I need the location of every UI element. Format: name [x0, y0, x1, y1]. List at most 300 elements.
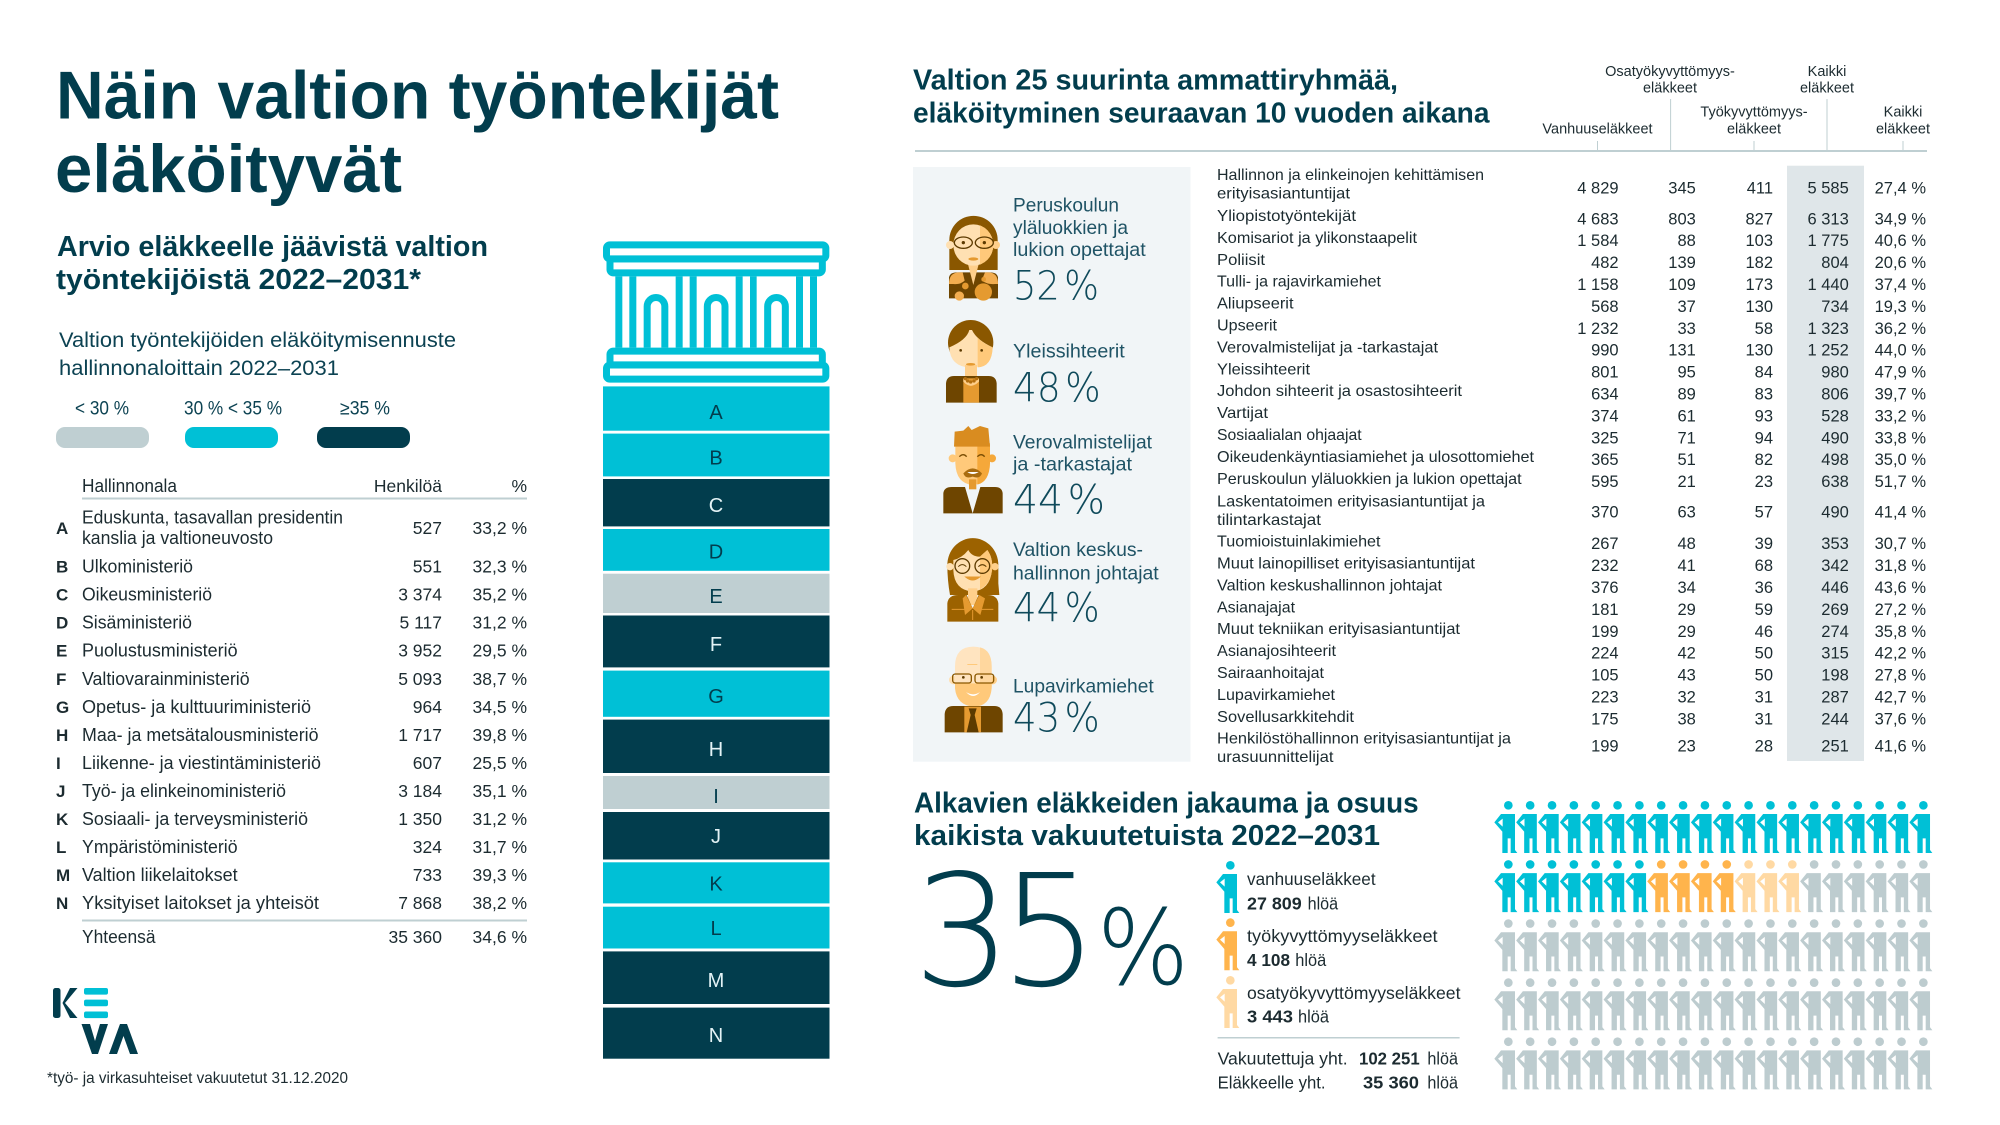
row: 131	[1668, 342, 1696, 360]
row: 61	[1677, 407, 1696, 425]
person: directors	[946, 538, 1159, 632]
row: 990	[1591, 342, 1619, 360]
legend: partial disability pension	[1216, 976, 1461, 1028]
row H: Maa- ja metsätalousministeriö	[82, 725, 318, 745]
block L: L	[710, 918, 722, 940]
row: 41,4 %	[1875, 504, 1926, 522]
row B: B	[56, 558, 68, 577]
row: 44,0 %	[1875, 342, 1926, 360]
row: 71	[1677, 429, 1696, 447]
row: 95	[1677, 364, 1696, 382]
block I	[603, 776, 830, 809]
row: 139	[1668, 254, 1696, 272]
row: 33	[1677, 320, 1696, 338]
column headers: eläkkeet	[1876, 121, 1930, 137]
row: 4 683	[1577, 210, 1619, 228]
row: 199	[1591, 623, 1619, 641]
block G	[603, 671, 830, 717]
label: licensing officers	[1013, 676, 1154, 742]
row	[1217, 730, 1926, 766]
row I: I	[56, 754, 61, 773]
row: 23	[1755, 473, 1773, 491]
row: 31	[1755, 710, 1773, 728]
row: Yleissihteerit	[1217, 361, 1311, 378]
table header	[82, 476, 527, 500]
row: 804	[1821, 254, 1849, 272]
row: Sairaanhoitajat	[1217, 665, 1325, 682]
footnote: *työ- ja virkasuhteiset vakuutetut 31.12.2020	[47, 1070, 348, 1087]
row A: A	[56, 519, 68, 538]
row: 59	[1755, 601, 1773, 619]
row N: 7 868	[398, 893, 442, 913]
row: 181	[1591, 601, 1619, 619]
row: 370	[1591, 504, 1619, 522]
block J: J	[711, 826, 721, 848]
row C: 35,2 %	[473, 585, 527, 605]
block C: C	[709, 495, 723, 517]
row D: D	[56, 614, 68, 633]
legend: disability pension: 4 108	[1247, 950, 1290, 970]
table total: Yhteensä	[82, 927, 156, 947]
legend: old-age pension: 27 809	[1247, 893, 1302, 913]
row L: L	[56, 838, 66, 857]
row: 57	[1755, 504, 1773, 522]
person: tax officers	[943, 426, 1153, 523]
row: 37,4 %	[1875, 276, 1926, 294]
row	[1217, 556, 1926, 575]
row: 35,0 %	[1875, 451, 1926, 469]
row: 103	[1745, 232, 1773, 250]
row	[1217, 534, 1926, 553]
heading: occupational groups: eläköityminen seuraavan 10 vuoden aikana	[913, 97, 1490, 129]
totals: Eläkkeelle yht.	[1218, 1072, 1326, 1092]
row	[1217, 687, 1926, 706]
row	[1217, 383, 1926, 404]
row	[1217, 449, 1926, 469]
block H	[603, 720, 830, 773]
row: 51,7 %	[1875, 473, 1926, 491]
label: teachers: yläluokkien ja	[1013, 217, 1128, 239]
label: teachers: Peruskoulun	[1013, 195, 1119, 217]
row: Johdon sihteerit ja osastosihteerit	[1217, 383, 1463, 400]
heading: pension distribution	[914, 787, 1419, 852]
row: 827	[1745, 210, 1773, 228]
row J: Työ- ja elinkeinoministeriö	[82, 781, 286, 801]
person: licensing officers	[945, 647, 1154, 742]
label: teachers: 52 %	[1013, 263, 1099, 309]
row G: 34,5 %	[473, 697, 527, 717]
block K	[603, 862, 830, 903]
row: 21	[1677, 473, 1696, 491]
row: 41	[1677, 557, 1696, 575]
label: licensing officers: 43 %	[1013, 696, 1100, 742]
big number: 35 %: 35	[913, 841, 1099, 1022]
row K	[56, 809, 527, 829]
row C: 3 374	[398, 585, 442, 605]
block D	[603, 529, 830, 571]
row D: Sisäministeriö	[82, 613, 192, 633]
row J: 3 184	[398, 781, 442, 801]
row: 35,8 %	[1875, 623, 1926, 641]
row M: 39,3 %	[473, 865, 527, 885]
row: 498	[1821, 451, 1849, 469]
row: 182	[1745, 254, 1773, 272]
totals: Vakuutettuja yht.	[1218, 1048, 1348, 1068]
label: tax officers	[1012, 431, 1153, 523]
row B: 32,3 %	[473, 557, 527, 577]
row E: 3 952	[398, 641, 442, 661]
heading: occupational groups: Valtion 25 suurinta ammattiryhmää,	[913, 64, 1398, 96]
row	[1217, 665, 1926, 685]
row: 490	[1821, 504, 1849, 522]
row: 83	[1755, 386, 1773, 404]
row H	[56, 725, 527, 745]
column headers: eläkkeet	[1800, 81, 1854, 97]
row: 130	[1745, 342, 1773, 360]
subheading: forecast by administrative branch: Valtion työntekijöiden eläköitymisennuste	[59, 329, 456, 352]
row A: kanslia ja valtioneuvosto	[82, 528, 273, 548]
row: 1 252	[1808, 342, 1849, 360]
row E: E	[56, 642, 67, 661]
row L	[56, 837, 527, 857]
row: 6 313	[1808, 210, 1849, 228]
row: 353	[1821, 535, 1849, 553]
highlighted column background	[1787, 166, 1864, 761]
heading: estimate of retirees	[56, 231, 488, 296]
block C	[603, 479, 830, 526]
row: 43	[1677, 667, 1696, 685]
row A: Eduskunta, tasavallan presidentin	[82, 508, 343, 528]
legend	[56, 399, 410, 448]
row	[1217, 318, 1926, 338]
row: Upseerit	[1217, 318, 1278, 334]
label: teachers: lukion opettajat	[1013, 239, 1146, 261]
row: 46	[1755, 623, 1773, 641]
row N: 38,2 %	[473, 893, 527, 913]
row: 325	[1591, 429, 1619, 447]
label: secretaries: 48 %	[1013, 366, 1101, 412]
table: branches	[56, 476, 527, 947]
row M	[56, 865, 527, 885]
column headers	[915, 64, 1930, 152]
row B	[56, 557, 527, 577]
row H: 39,8 %	[473, 725, 527, 745]
row: 595	[1591, 473, 1619, 491]
row: 4 829	[1577, 179, 1619, 197]
row: Muut lainopilliset erityisasiantuntijat	[1217, 556, 1476, 572]
row	[1217, 167, 1926, 203]
row: 42	[1677, 645, 1696, 663]
row: 287	[1821, 688, 1849, 706]
totals: 35 360	[1363, 1072, 1419, 1092]
row: Aliupseerit	[1217, 296, 1294, 313]
heading: pension distribution: Alkavien eläkkeiden jakauma ja osuus	[914, 787, 1419, 819]
row	[1217, 361, 1926, 382]
row: tilintarkastajat	[1217, 512, 1322, 529]
row: 33,8 %	[1875, 429, 1926, 447]
row: 50	[1755, 667, 1773, 685]
row: 40,6 %	[1875, 232, 1926, 250]
legend: disability pension: työkyvyttömyyseläkkeet	[1247, 926, 1438, 946]
legend: old-age pension	[1216, 861, 1376, 913]
row: 29	[1677, 623, 1696, 641]
panel: top occupational groups	[913, 167, 1190, 762]
row	[1217, 471, 1926, 491]
legend: old-age pension: hlöä	[1308, 893, 1338, 913]
row: 34,9 %	[1875, 210, 1926, 228]
block F: F	[710, 634, 722, 656]
row: 47,9 %	[1875, 364, 1926, 382]
row: 223	[1591, 688, 1619, 706]
table total: 35 360	[388, 927, 442, 947]
row B: 551	[413, 557, 442, 577]
row: 365	[1591, 451, 1619, 469]
row	[1217, 599, 1926, 619]
row: Sovellusarkkitehdit	[1217, 709, 1355, 726]
row: 42,7 %	[1875, 688, 1926, 706]
row C: Oikeusministeriö	[82, 585, 212, 605]
row B: Ulkoministeriö	[82, 557, 193, 577]
column headers: Kaikki	[1884, 105, 1922, 121]
row E: Puolustusministeriö	[82, 641, 238, 661]
totals: 102 251	[1359, 1048, 1420, 1068]
title: eläköityvät	[55, 131, 402, 207]
row: Asianajosihteerit	[1217, 643, 1337, 660]
row G: G	[56, 698, 69, 717]
label: tax officers: ja -tarkastajat	[1012, 454, 1133, 476]
row: Verovalmistelijat ja -tarkastajat	[1217, 339, 1439, 356]
totals: hlöä	[1427, 1048, 1458, 1068]
row	[1217, 427, 1926, 447]
row K: Sosiaali- ja terveysministeriö	[82, 809, 308, 829]
icon: female teacher	[946, 216, 1000, 301]
block J	[603, 812, 830, 860]
row F	[56, 669, 527, 689]
row I: Liikenne- ja viestintäministeriö	[82, 753, 321, 773]
row	[1217, 493, 1926, 529]
legend: disability pension: hlöä	[1295, 950, 1327, 970]
row: 23	[1677, 738, 1696, 756]
block A	[603, 386, 830, 431]
row: Valtion keskushallinnon johtajat	[1217, 577, 1443, 594]
row F: 38,7 %	[473, 669, 527, 689]
block I: I	[713, 786, 719, 808]
row E: 29,5 %	[473, 641, 527, 661]
row	[1217, 230, 1926, 250]
row: 29	[1677, 601, 1696, 619]
row: 34	[1677, 579, 1696, 597]
row: 93	[1755, 407, 1773, 425]
row	[1217, 339, 1926, 360]
icon: female director	[946, 538, 999, 622]
row: Oikeudenkäyntiasiamiehet ja ulosottomiehet	[1217, 449, 1535, 466]
row: 51	[1677, 451, 1696, 469]
label: tax officers: Verovalmistelijat	[1013, 431, 1153, 453]
block N	[603, 1008, 830, 1059]
row F: Valtiovarainministeriö	[82, 669, 250, 689]
row: Lupavirkamiehet	[1217, 687, 1336, 704]
row: 32	[1677, 688, 1696, 706]
row: 130	[1745, 298, 1773, 316]
row: Tuomioistuinlakimiehet	[1217, 534, 1381, 551]
row L: 324	[413, 837, 442, 857]
row: erityisasiantuntijat	[1217, 186, 1351, 203]
heading: estimate of retirees: Arvio eläkkeelle jäävistä valtion	[57, 231, 488, 263]
row: 84	[1755, 364, 1773, 382]
row: 36	[1755, 579, 1773, 597]
row: 28	[1755, 738, 1773, 756]
block E	[603, 574, 830, 613]
row K: 1 350	[398, 809, 442, 829]
block B	[603, 434, 830, 476]
row: 244	[1821, 710, 1849, 728]
column headers: Vanhuuseläkkeet	[1542, 121, 1653, 137]
row: 37	[1677, 298, 1696, 316]
row: Tulli- ja rajavirkamiehet	[1217, 274, 1382, 291]
row: 82	[1755, 451, 1773, 469]
row N: Yksityiset laitokset ja yhteisöt	[82, 893, 319, 913]
row	[1217, 405, 1926, 425]
person: secretaries	[946, 320, 1125, 412]
column headers: eläkkeet	[1643, 81, 1697, 97]
chart: stacked column of branches	[603, 386, 830, 1059]
pictogram: 100 persons	[1494, 801, 1932, 1089]
row: 27,2 %	[1875, 601, 1926, 619]
table header: Henkilöä	[374, 476, 442, 496]
row: 980	[1821, 364, 1849, 382]
row: Yliopistotyöntekijät	[1217, 208, 1357, 225]
row: 31	[1755, 688, 1773, 706]
row C	[56, 585, 527, 605]
subheading: forecast by administrative branch	[59, 329, 456, 380]
table header: %	[511, 476, 527, 496]
block B: B	[709, 448, 723, 470]
row: Poliisit	[1217, 252, 1266, 269]
row C: C	[56, 586, 68, 605]
row: 267	[1591, 535, 1619, 553]
block D: D	[709, 542, 723, 564]
row F: F	[56, 670, 66, 689]
row	[1217, 208, 1926, 228]
row J	[56, 781, 527, 801]
row: 801	[1591, 364, 1619, 382]
row: 634	[1591, 386, 1619, 404]
row: 638	[1821, 473, 1849, 491]
row G: 964	[413, 697, 442, 717]
row: 232	[1591, 557, 1619, 575]
row: 42,2 %	[1875, 645, 1926, 663]
legend: 30 % < 35 %	[184, 399, 282, 420]
row	[1217, 296, 1926, 316]
row: 37,6 %	[1875, 710, 1926, 728]
title	[55, 58, 779, 207]
block A: A	[709, 402, 723, 424]
legend: disability pension	[1216, 918, 1438, 970]
row: 27,8 %	[1875, 667, 1926, 685]
row: 19,3 %	[1875, 298, 1926, 316]
row	[1217, 621, 1926, 641]
row: 5 585	[1808, 179, 1849, 197]
row: 33,2 %	[1875, 407, 1926, 425]
subheading: forecast by administrative branch: hallinnonaloittain 2022–2031	[59, 357, 339, 380]
icon: male licensing officer	[945, 647, 1003, 732]
row: 342	[1821, 557, 1849, 575]
big number: 35 %	[913, 841, 1189, 1022]
label: teachers	[1013, 195, 1146, 309]
block M	[603, 951, 830, 1004]
row	[1217, 643, 1926, 663]
block K: K	[709, 874, 723, 896]
row G: Opetus- ja kulttuuriministeriö	[82, 697, 311, 717]
row: 41,6 %	[1875, 738, 1926, 756]
label: directors: Valtion keskus-	[1013, 539, 1143, 561]
row: 1 158	[1577, 276, 1619, 294]
row J: 35,1 %	[473, 781, 527, 801]
row A: 33,2 %	[473, 518, 527, 538]
row K: K	[56, 810, 69, 829]
row K: 31,2 %	[473, 809, 527, 829]
row: 411	[1747, 179, 1773, 197]
heading: occupational groups	[913, 64, 1490, 129]
row	[1217, 577, 1926, 597]
column headers: eläkkeet	[1727, 121, 1781, 137]
row: 20,6 %	[1875, 254, 1926, 272]
row: 89	[1677, 386, 1696, 404]
row: 48	[1677, 535, 1696, 553]
row: 376	[1591, 579, 1619, 597]
legend: partial disability pension: osatyökyvyttömyyseläkkeet	[1247, 983, 1461, 1003]
row: 173	[1745, 276, 1773, 294]
legend: ≥35 %	[340, 399, 390, 420]
icon: male tax officer	[943, 426, 1003, 513]
label: licensing officers: Lupavirkamiehet	[1013, 676, 1154, 698]
row: 803	[1668, 210, 1696, 228]
row: 27,4 %	[1875, 179, 1926, 197]
big number: 35 %: %	[1097, 887, 1189, 1009]
row: 105	[1591, 667, 1619, 685]
row: 528	[1821, 407, 1849, 425]
row: 269	[1821, 601, 1849, 619]
block H: H	[709, 739, 723, 761]
label: secretaries	[1013, 340, 1125, 412]
row: 63	[1677, 504, 1696, 522]
row: urasuunnittelijat	[1217, 749, 1334, 766]
row: 109	[1668, 276, 1696, 294]
row: 446	[1821, 579, 1849, 597]
row: 274	[1821, 623, 1849, 641]
row: 36,2 %	[1875, 320, 1926, 338]
row M: Valtion liikelaitokset	[82, 865, 238, 885]
totals	[1218, 1037, 1460, 1092]
row: 31,8 %	[1875, 557, 1926, 575]
row: Laskentatoimen erityisasiantuntijat ja	[1217, 493, 1485, 510]
row D: 31,2 %	[473, 613, 527, 633]
row E	[56, 641, 527, 661]
row	[1217, 274, 1926, 294]
row: 43,6 %	[1875, 579, 1926, 597]
row N	[56, 893, 527, 913]
legend: old-age pension: vanhuuseläkkeet	[1247, 869, 1376, 889]
table total	[82, 920, 527, 947]
row: Muut tekniikan erityisasiantuntijat	[1217, 621, 1461, 638]
column headers: Kaikki	[1808, 64, 1846, 80]
row: Sosiaalialan ohjaajat	[1217, 427, 1362, 444]
row: 1 584	[1577, 232, 1619, 250]
row	[1217, 709, 1926, 728]
row M: 733	[413, 865, 442, 885]
table header: Hallinnonala	[82, 476, 178, 496]
table: occupational groups	[1217, 167, 1926, 766]
